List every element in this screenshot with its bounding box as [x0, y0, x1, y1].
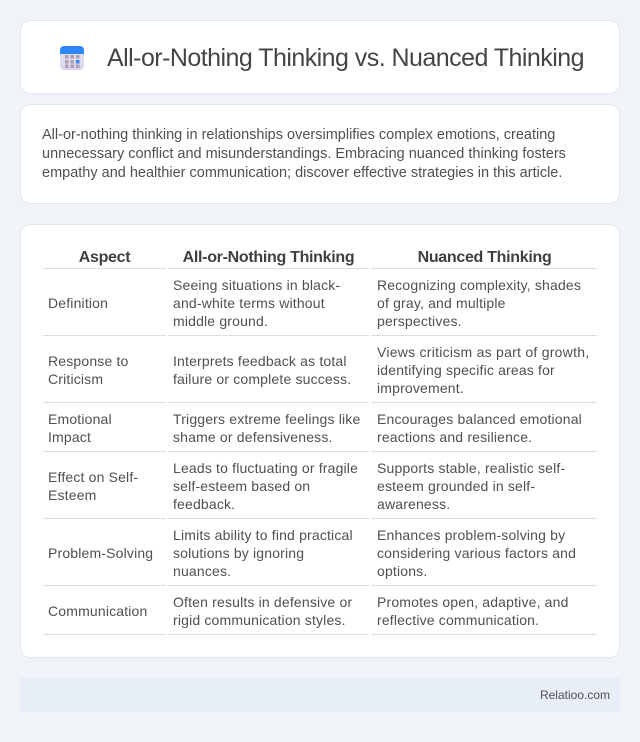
row: communication: rigid communication styles.	[173, 612, 346, 628]
row: emotional impact: Emotional	[48, 411, 112, 427]
row: problem-solving: Enhances problem-solving by	[377, 527, 565, 543]
row: communication: Communication	[48, 603, 147, 619]
row: definition: Recognizing complexity, shades	[377, 277, 581, 293]
row: response to criticism: Criticism	[48, 371, 103, 387]
row: communication: Often results in defensive or	[173, 594, 352, 610]
row: definition	[43, 277, 597, 336]
row: problem-solving: nuances.	[173, 563, 231, 579]
row: emotional impact: reactions and resilience.	[377, 429, 532, 445]
title: All-or-Nothing Thinking vs. Nuanced Thinking	[107, 44, 584, 72]
row: response to criticism: Interprets feedback as total	[173, 353, 347, 369]
row: definition: middle ground.	[173, 313, 268, 329]
row: response to criticism: identifying specific areas for	[377, 362, 555, 378]
row: definition: of gray, and multiple	[377, 295, 506, 311]
panel: introduction	[20, 104, 620, 204]
footer bar	[20, 678, 620, 712]
row: definition: Definition	[48, 295, 108, 311]
icon: calendar	[60, 46, 84, 70]
row: communication: Promotes open, adaptive, and	[377, 594, 569, 610]
intro text: empathy and healthier communication; discover effective strategies in this article.	[42, 165, 562, 181]
row: emotional impact: Encourages balanced emotional	[377, 411, 582, 427]
intro text: All-or-nothing thinking in relationships oversimplifies complex emotions, creating	[42, 127, 555, 143]
comparison table	[43, 249, 597, 635]
row: problem-solving: solutions by ignoring	[173, 545, 304, 561]
intro text: unnecessary conflict and misunderstandings. Embracing nuanced thinking fosters	[42, 146, 566, 162]
row: effect on self-esteem: Effect on Self-	[48, 469, 138, 485]
row: definition: perspectives.	[377, 313, 462, 329]
row: emotional impact: shame or defensiveness.	[173, 429, 333, 445]
row: effect on self-esteem: feedback.	[173, 496, 235, 512]
row: response to criticism: improvement.	[377, 380, 464, 396]
table header	[43, 249, 597, 269]
table header: Aspect	[79, 249, 130, 266]
intro text	[42, 127, 566, 181]
row: effect on self-esteem: awareness.	[377, 496, 450, 512]
row: problem-solving: options.	[377, 563, 427, 579]
row: effect on self-esteem: Esteem	[48, 487, 96, 503]
table header: All-or-Nothing Thinking	[183, 249, 354, 266]
row: problem-solving: Problem-Solving	[48, 545, 153, 561]
row: effect on self-esteem: Leads to fluctuating or fragile	[173, 460, 358, 476]
row: response to criticism	[43, 344, 597, 403]
row: definition: Seeing situations in black-	[173, 277, 340, 293]
row: emotional impact	[43, 411, 597, 452]
row: problem-solving	[43, 527, 597, 586]
row: effect on self-esteem: self-esteem based on	[173, 478, 310, 494]
row: effect on self-esteem: esteem grounded in self-	[377, 478, 535, 494]
row: problem-solving: considering various factors and	[377, 545, 576, 561]
row: communication: reflective communication.	[377, 612, 539, 628]
row: effect on self-esteem: Supports stable, realistic self-	[377, 460, 565, 476]
row: emotional impact: Triggers extreme feelings like	[173, 411, 360, 427]
table header: Nuanced Thinking	[418, 249, 551, 266]
row: effect on self-esteem	[43, 460, 597, 519]
row: response to criticism: Views criticism as part of growth,	[377, 344, 589, 360]
row: response to criticism: failure or complete success.	[173, 371, 351, 387]
row: emotional impact: Impact	[48, 429, 91, 445]
panel: comparison table	[20, 224, 620, 658]
panel: title card	[20, 20, 620, 94]
row: communication	[43, 594, 597, 635]
footer credit: Relatioo.com	[540, 688, 610, 702]
row: problem-solving: Limits ability to find practical	[173, 527, 353, 543]
row: definition: and-white terms without	[173, 295, 325, 311]
row: response to criticism: Response to	[48, 353, 128, 369]
